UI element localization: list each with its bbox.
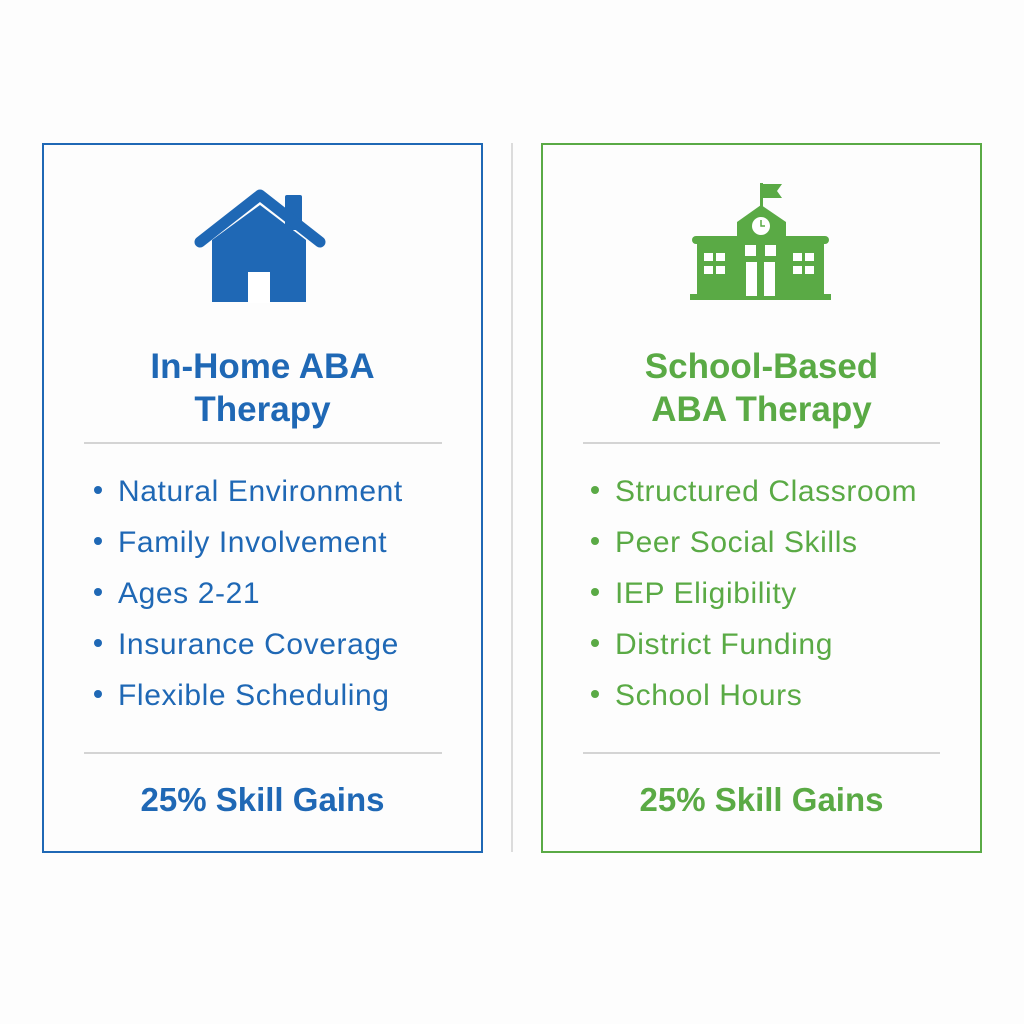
icon: house: [194, 190, 326, 302]
panel: school-based: Structured Classroom: [615, 475, 917, 508]
panel: in-home: Natural Environment: [118, 475, 403, 508]
title: school-based: ABA Therapy: [651, 390, 872, 429]
footer stat: in-home: 25% Skill Gains: [141, 781, 384, 818]
panel: in-home: Ages 2-21: [118, 577, 260, 610]
title: in-home: Therapy: [194, 390, 331, 429]
icon: school: [690, 183, 831, 300]
footer stat: school: 25% Skill Gains: [640, 781, 883, 818]
panel: in-home: Insurance Coverage: [118, 628, 399, 661]
panel: school-based: Peer Social Skills: [615, 526, 858, 559]
panel: in-home: [42, 143, 483, 853]
list: school features: [591, 475, 917, 712]
title: school-based: School-Based: [645, 347, 878, 386]
panel: in-home: Flexible Scheduling: [118, 679, 390, 712]
panel: school-based: School Hours: [615, 679, 802, 712]
panel: school-based: IEP Eligibility: [615, 577, 797, 610]
list: in-home features: [94, 475, 403, 712]
divider: center: [511, 143, 513, 852]
panel: in-home: Family Involvement: [118, 526, 387, 559]
title: in-home: [150, 347, 375, 429]
title: school-based: [645, 347, 878, 429]
panel: school-based: [541, 143, 982, 853]
panel: school-based: District Funding: [615, 628, 833, 661]
title: in-home: In-Home ABA: [150, 347, 375, 386]
